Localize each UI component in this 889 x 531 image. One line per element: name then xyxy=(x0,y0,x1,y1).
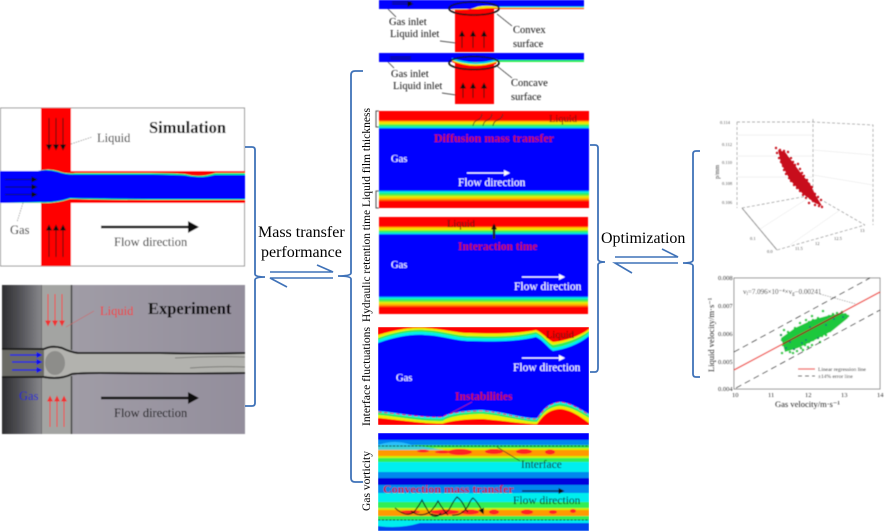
panel: simulation xyxy=(0,108,245,266)
x axis labels: 12 xyxy=(805,392,812,399)
label: liquid: Liquid xyxy=(546,330,575,341)
label: liquid inlet: Liquid inlet xyxy=(393,81,442,92)
equation: =7.096×10⁻⁴×v xyxy=(748,288,793,296)
axis labels: 3D plot xyxy=(720,120,865,254)
axis labels: 3D plot: 0.0 xyxy=(767,249,773,254)
axis labels: 3D plot: 12 xyxy=(815,241,820,246)
label: convection mass transfer: Convection mass transfer xyxy=(383,482,514,496)
bracket: center right group xyxy=(590,145,605,372)
bracket: left group xyxy=(245,147,265,406)
axis labels: 3D plot: 0.112 xyxy=(722,142,732,147)
y axis labels: 0.008 xyxy=(718,275,733,282)
vertical label: interface fluctuations: Interface fluctuations xyxy=(359,327,373,426)
equation: v xyxy=(743,288,746,296)
arrow: flow direction in experiment xyxy=(101,397,197,399)
equation: l xyxy=(746,292,748,297)
label: flow direction: Flow direction xyxy=(458,177,526,189)
label: flow direction: Flow direction xyxy=(513,362,581,374)
label: interface: Interface xyxy=(521,459,562,471)
x axis labels: 13 xyxy=(841,392,848,399)
vertical label: gas vorticity: Gas vorticity xyxy=(359,451,373,511)
panel: interface fluctuations contour xyxy=(378,327,589,425)
heading: experiment: Experiment xyxy=(148,299,232,318)
arrow: flow direction xyxy=(522,276,564,278)
equation: g xyxy=(792,292,795,297)
arrow: interaction time xyxy=(493,225,495,239)
label: concave surface: surface xyxy=(511,92,542,103)
text: mass transfer performance: performance xyxy=(261,244,342,261)
label: liquid: Liquid xyxy=(97,131,131,145)
y axis labels: 0.005 xyxy=(718,359,733,366)
shape: concave ellipse xyxy=(449,56,499,70)
icon: gas arrows in simulation xyxy=(5,180,36,194)
label: liquid inlet: Liquid inlet xyxy=(390,29,439,40)
icon: diffusion squiggles xyxy=(473,114,503,126)
label: concave surface: Concave xyxy=(511,78,548,89)
scatter points: green cloud xyxy=(781,311,848,353)
panel: concave surface inlet xyxy=(379,53,584,104)
arrow: left double harpoon xyxy=(270,265,333,287)
y axis labels xyxy=(718,275,733,393)
label: gas inlet: Gas inlet xyxy=(391,69,429,80)
axis labels: 3D plot: 0.110 xyxy=(722,160,733,165)
panel: experiment xyxy=(2,285,245,434)
arrow: flow direction xyxy=(522,490,563,492)
icon: black inlet arrows xyxy=(390,57,484,98)
heading: simulation: Simulation xyxy=(149,118,226,137)
axis labels: 3D plot: 11.5 xyxy=(795,246,803,251)
text: mass transfer performance: Mass transfer xyxy=(258,224,345,241)
x axis labels: 11 xyxy=(768,392,774,399)
lines: error bounds xyxy=(734,278,880,388)
legend xyxy=(798,367,867,380)
text: optimization: Optimization xyxy=(601,230,685,247)
icon: gas arrows in experiment xyxy=(10,355,41,370)
panel: convex surface inlet xyxy=(379,0,584,52)
shape: red cloud density xyxy=(778,150,822,206)
arrow: flow direction in simulation xyxy=(101,226,197,228)
axis labels: 3D plot: 0.114 xyxy=(720,120,731,125)
label: liquid: Liquid xyxy=(100,304,134,318)
x axis labels: 10 xyxy=(732,392,738,399)
panel: gas vorticity contour xyxy=(378,433,589,531)
legend: Linear regression line xyxy=(818,367,867,373)
y axis labels: 0.006 xyxy=(718,331,733,338)
axis labels: 3D plot: 13 xyxy=(860,228,865,233)
label: gas: Gas xyxy=(391,154,407,165)
bracket: film thickness bottom xyxy=(376,191,379,208)
axis title: gas velocity: Gas velocity/m·s⁻¹ xyxy=(775,399,840,409)
label: flow direction: Flow direction xyxy=(114,235,188,249)
arrow: flow direction xyxy=(522,357,564,359)
label: instabilities: Instabilities xyxy=(455,391,513,403)
shapes: orange-red vorticity cores xyxy=(400,449,576,514)
chart: 3D scatter plot xyxy=(715,119,873,254)
label: gas inlet: Gas inlet xyxy=(389,17,427,28)
y axis labels: 0.007 xyxy=(718,303,733,310)
axis labels: 3D plot: 12.5 xyxy=(834,236,843,241)
label: gas: Gas xyxy=(10,223,30,237)
label: convex surface: surface xyxy=(513,39,544,50)
label: flow direction: Flow direction xyxy=(514,281,582,293)
icon: liquid arrows in experiment xyxy=(48,294,64,427)
shape: green cloud density xyxy=(781,313,848,352)
icon: convection spiral arrow xyxy=(395,497,483,516)
label: liquid: Liquid xyxy=(447,219,476,230)
label: interaction time: Interaction time xyxy=(458,241,538,253)
label: flow direction: Flow direction xyxy=(114,406,188,420)
icon: liquid arrows in simulation xyxy=(49,118,63,257)
label: flow direction: Flow direction xyxy=(513,495,581,507)
panel: liquid film thickness contour xyxy=(376,111,589,208)
legend: ±14% error line xyxy=(818,374,853,380)
label: liquid: Liquid xyxy=(549,114,578,125)
axis labels: 3D plot: 0.1 xyxy=(750,236,756,241)
axis title: 3D plot: p/mm xyxy=(715,165,721,179)
y axis labels: 0.004 xyxy=(718,386,733,393)
line: dashed instability interface xyxy=(378,402,589,419)
vertical label: liquid film thickness: Liquid film thickness xyxy=(359,108,373,207)
line: linear regression xyxy=(734,292,880,370)
label: convex surface: Convex xyxy=(513,25,546,36)
icon: black inlet arrows xyxy=(392,2,484,48)
x axis labels xyxy=(732,392,884,399)
panel: hydraulic retention time contour xyxy=(379,217,588,314)
label: gas: Gas xyxy=(396,373,412,384)
bracket: film thickness top xyxy=(376,111,379,127)
axis labels: 3D plot: 0.108 xyxy=(722,181,733,186)
arrow: flow direction xyxy=(467,172,509,174)
shape: convex ellipse xyxy=(449,2,499,15)
bracket: center group xyxy=(338,71,363,482)
lines: dashed interface xyxy=(378,446,589,520)
bracket: right group xyxy=(683,151,700,377)
x axis labels: 14 xyxy=(877,392,884,399)
label: gas: Gas xyxy=(391,260,407,271)
vertical label: hydraulic retention time: Hydraulic retention time xyxy=(359,210,373,322)
label: diffusion mass transfer: Diffusion mass transfer xyxy=(434,131,555,145)
label: gas: Gas xyxy=(19,389,39,403)
axis title: liquid velocity: Liquid velocity/m·s⁻¹ xyxy=(706,297,716,372)
axis labels: 3D plot: 0.106 xyxy=(722,200,733,205)
chart: liquid vs gas velocity regression xyxy=(706,275,884,409)
arrow: right double harpoon xyxy=(615,249,678,273)
scatter points: red cloud xyxy=(776,148,822,207)
equation: −0.00241 xyxy=(795,288,822,296)
